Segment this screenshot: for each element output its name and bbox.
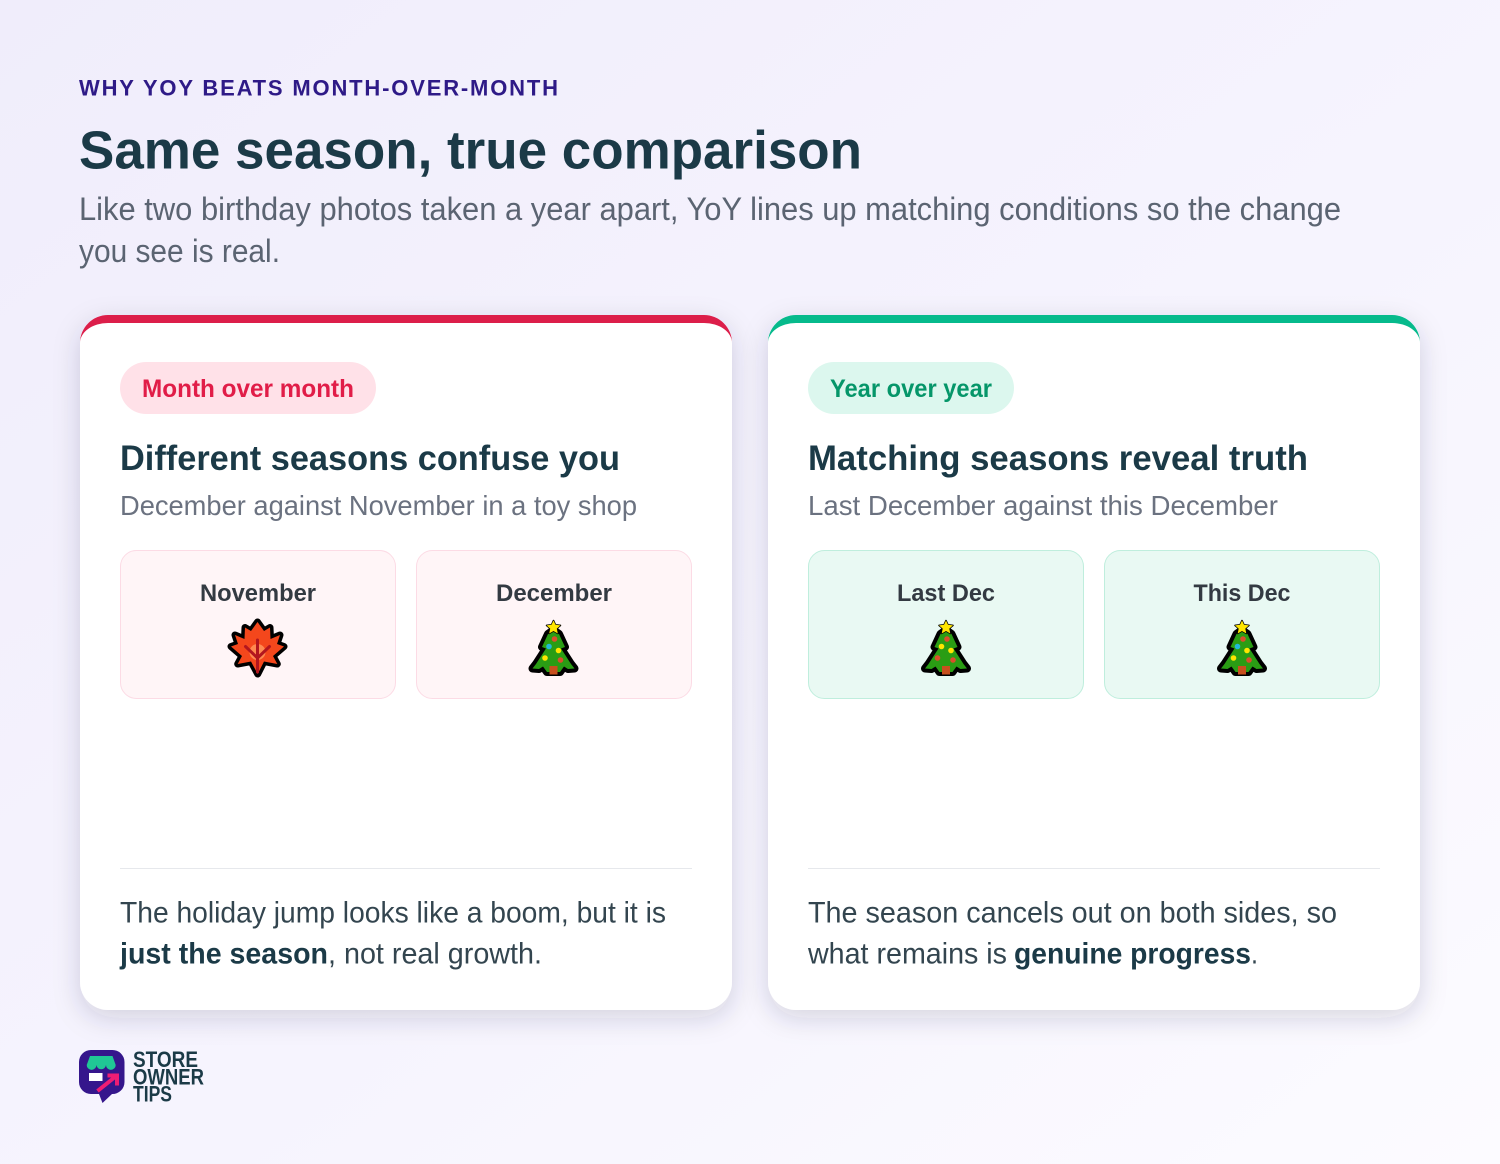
panel: month over month	[80, 315, 732, 1010]
pill: year over year	[808, 362, 1014, 414]
panel conclusion: , not real growth.	[328, 938, 542, 970]
icon: store chat bubble	[79, 1050, 125, 1103]
icon: christmas tree	[1221, 620, 1263, 674]
icon: maple leaf	[231, 622, 284, 674]
pill: month over month	[120, 362, 376, 414]
tile: November	[120, 550, 396, 698]
pill: month over month: Month over month	[142, 375, 354, 403]
panel heading: Matching seasons reveal truth	[808, 439, 1308, 478]
panel subheading: December against November in a toy shop	[120, 490, 637, 521]
logo	[79, 1047, 204, 1106]
tile: Last Dec: Last Dec	[897, 580, 995, 607]
icon: christmas tree	[925, 620, 967, 674]
tile: December: December	[496, 580, 612, 607]
logo wordmark: STORE	[133, 1047, 198, 1072]
tile: This Dec	[1104, 550, 1380, 698]
title: Same season, true comparison	[79, 120, 862, 180]
logo wordmark	[133, 1047, 204, 1106]
icon: christmas tree	[532, 620, 574, 674]
panel conclusion: The season cancels out on both sides, so	[808, 896, 1337, 930]
pill: year over year: Year over year	[830, 375, 992, 403]
panel heading: Different seasons confuse you	[120, 439, 620, 478]
panel conclusion: what remains is	[807, 938, 1007, 970]
panel conclusion: The holiday jump looks like a boom, but it is	[120, 896, 666, 930]
panel: year over year	[768, 315, 1420, 1010]
panel conclusion: just the season	[119, 938, 328, 970]
panel conclusion	[807, 896, 1337, 970]
tile: December	[416, 550, 692, 698]
logo wordmark: TIPS	[133, 1082, 172, 1106]
panel conclusion: genuine progress	[1014, 938, 1251, 970]
panel conclusion: .	[1251, 938, 1258, 970]
subtitle: you see is real.	[79, 233, 280, 269]
panel conclusion	[119, 896, 666, 970]
tile: This Dec: This Dec	[1194, 580, 1290, 607]
logo wordmark: OWNER	[133, 1064, 204, 1090]
panel subheading: Last December against this December	[808, 490, 1278, 521]
tile: November: November	[200, 580, 316, 607]
subtitle	[79, 191, 1341, 269]
subtitle: Like two birthday photos taken a year apart, YoY lines up matching conditions so the change	[79, 191, 1341, 227]
eyebrow: WHY YOY BEATS MONTH-OVER-MONTH	[79, 76, 558, 100]
tile: Last Dec	[808, 550, 1084, 698]
